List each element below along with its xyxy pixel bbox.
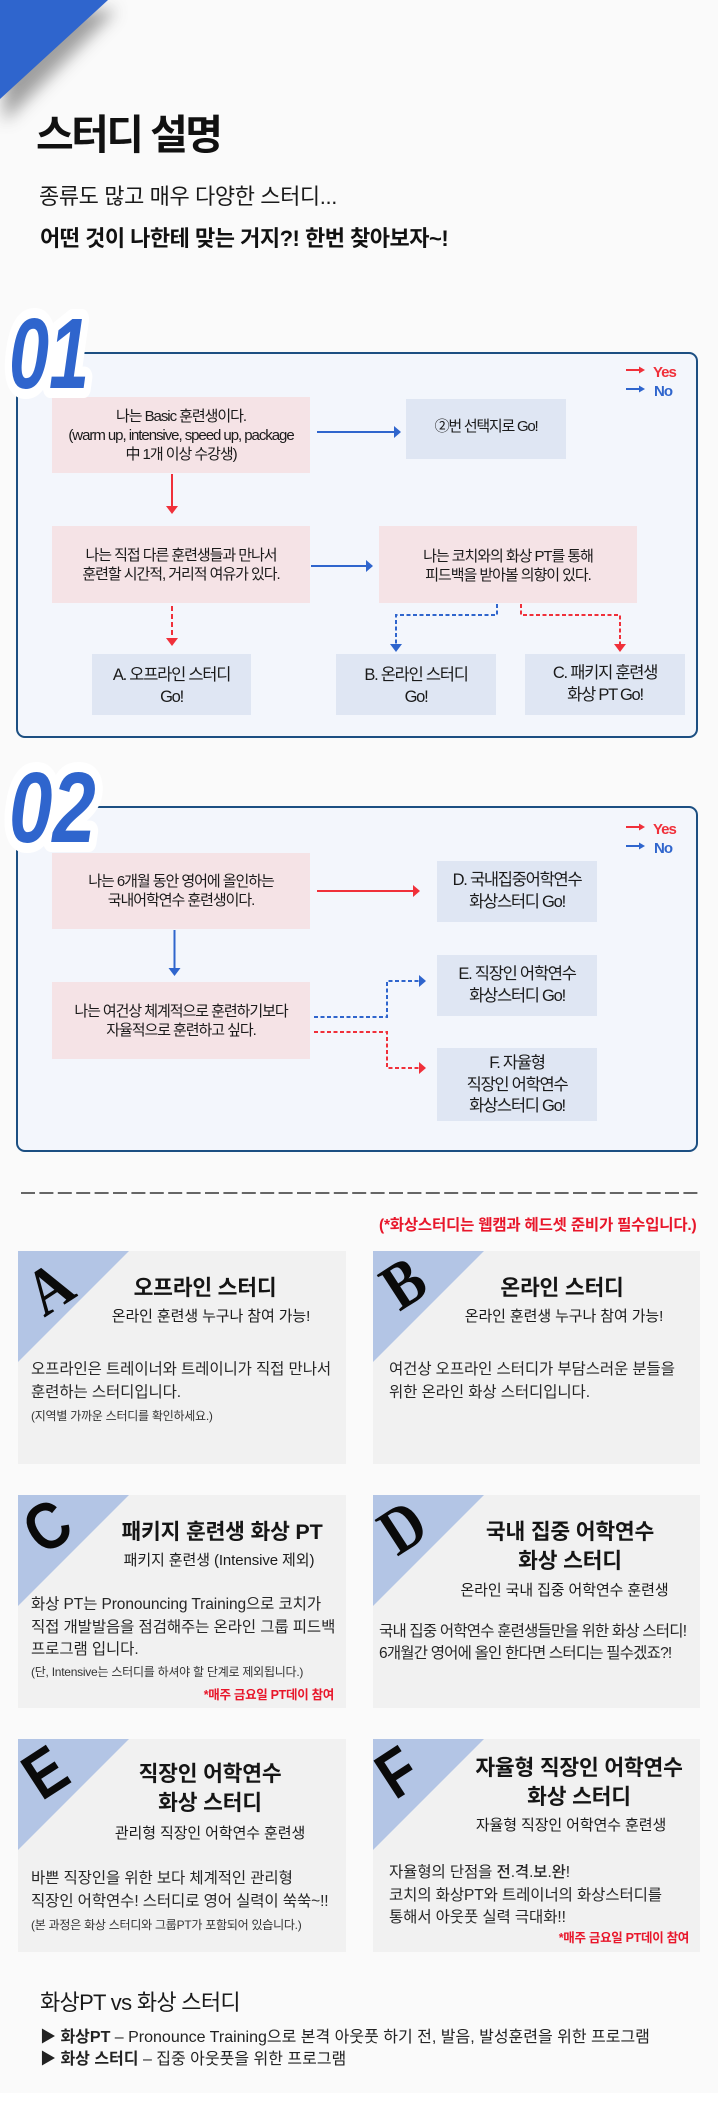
card F body: 코치의 화상PT와 트레이너의 화상스터디를	[389, 1886, 662, 1904]
legend	[626, 821, 677, 856]
panel: flowchart 02	[16, 806, 698, 1152]
panel: card C	[18, 1495, 346, 1708]
card D body: 국내 집중 어학연수 훈련생들만을 위한 화상 스터디!	[379, 1623, 686, 1640]
panel: card B	[373, 1251, 700, 1464]
webcam notice: (*화상스터디는 웹캠과 헤드셋 준비가 필수입니다.)	[379, 1217, 696, 1234]
result F: 화상스터디 Go!	[469, 1097, 565, 1115]
question: Basic trainee: (warm up, intensive, speed up, package	[68, 426, 294, 444]
result B: B. 온라인 스터디	[364, 666, 468, 684]
card F title	[475, 1756, 683, 1808]
question: self-directed: 자율적으로 훈련하고 싶다.	[106, 1022, 256, 1038]
card C body	[31, 1596, 335, 1658]
result B: Go!	[405, 688, 427, 706]
panel: card F	[373, 1739, 700, 1952]
result F: F. 자율형	[489, 1054, 545, 1072]
card C body: 화상 PT는 Pronouncing Training으로 코치가	[31, 1596, 321, 1613]
question: offline time: 나는 직접 다른 훈련생들과 만나서	[86, 546, 276, 564]
card F body	[389, 1864, 662, 1926]
card A note: (지역별 가까운 스터디를 확인하세요.)	[31, 1409, 213, 1423]
card D title: 화상 스터디	[518, 1548, 622, 1572]
result A: Go!	[160, 688, 183, 706]
card D title: 국내 집중 어학연수	[486, 1520, 654, 1544]
card C body: 직접 개발발음을 점검해주는 온라인 그룹 피드백	[31, 1618, 335, 1636]
card B body	[389, 1361, 675, 1400]
result D: 화상스터디 Go!	[469, 892, 565, 910]
legend: Yes	[653, 821, 677, 838]
card E subtitle: 관리형 직장인 어학연수 훈련생	[115, 1825, 305, 1842]
card B subtitle: 온라인 훈련생 누구나 참여 가능!	[465, 1308, 663, 1325]
card E body: 바쁜 직장인을 위한 보다 체계적인 관리형	[31, 1870, 293, 1887]
card F title: 자율형 직장인 어학연수	[475, 1756, 683, 1780]
flow arrows	[166, 426, 626, 652]
comparison heading: 화상PT vs 화상 스터디	[40, 1990, 240, 2015]
card A body	[31, 1361, 331, 1400]
card A body: 훈련하는 스터디입니다.	[31, 1384, 181, 1400]
card B body: 여건상 오프라인 스터디가 부담스러운 분들을	[389, 1361, 675, 1378]
card E title: 화상 스터디	[158, 1790, 262, 1814]
card C body: 프로그램 입니다.	[31, 1641, 139, 1658]
panel: card D	[373, 1495, 700, 1708]
result A	[92, 654, 251, 715]
card D body: 6개월간 영어에 올인 한다면 스터디는 필수겠죠?!	[379, 1645, 671, 1662]
result: go to 2	[406, 399, 566, 459]
card D subtitle: 온라인 국내 집중 어학연수 훈련생	[460, 1582, 669, 1599]
card F subtitle: 자율형 직장인 어학연수 훈련생	[476, 1817, 666, 1834]
card B title: 온라인 스터디	[500, 1276, 624, 1300]
legend	[626, 364, 677, 399]
panel: flowchart 01	[16, 352, 698, 738]
question: offline time	[52, 526, 310, 603]
question: video PT	[379, 526, 637, 603]
result E: E. 직장인 어학연수	[458, 965, 576, 983]
question: 6 month immersion: 국내어학연수 훈련생이다.	[108, 892, 254, 909]
card F red note: *매주 금요일 PT데이 참여	[559, 1931, 689, 1945]
card E body: 직장인 어학연수! 스터디로 영어 실력이 쑥쑥~!!	[31, 1892, 328, 1910]
card D title	[486, 1520, 654, 1572]
result B	[336, 654, 496, 715]
card C red note: *매주 금요일 PT데이 참여	[204, 1688, 334, 1702]
card F title: 화상 스터디	[527, 1784, 631, 1808]
card A subtitle: 온라인 훈련생 누구나 참여 가능!	[112, 1308, 310, 1325]
question: self-directed	[52, 982, 310, 1059]
card A body: 오프라인은 트레이너와 트레이니가 직접 만나서	[31, 1361, 331, 1378]
panel: card A	[18, 1251, 346, 1464]
panel: card E	[18, 1739, 346, 1952]
question: self-directed: 나는 여건상 체계적으로 훈련하기보다	[74, 1002, 288, 1020]
result F	[437, 1048, 597, 1121]
card C title: 패키지 훈련생 화상 PT	[121, 1520, 323, 1544]
question: 6 month immersion	[52, 853, 310, 929]
card E title	[139, 1762, 281, 1814]
flow arrows	[168, 885, 426, 1074]
intro line 1: 종류도 많고 매우 다양한 스터디...	[39, 184, 337, 209]
result C: 화상 PT Go!	[567, 686, 643, 704]
card E body	[31, 1870, 328, 1910]
question: 6 month immersion: 나는 6개월 동안 영어에 올인하는	[88, 873, 274, 890]
result A: A. 오프라인 스터디	[113, 666, 230, 684]
card E note: (본 과정은 화상 스터디와 그룹PT가 포함되어 있습니다.)	[31, 1918, 302, 1932]
result E	[437, 955, 597, 1016]
question: Basic trainee: 나는 Basic 훈련생이다.	[116, 408, 246, 424]
result E: 화상스터디 Go!	[469, 986, 565, 1004]
card F body: 통해서 아웃풋 실력 극대화!!	[389, 1909, 566, 1926]
card B body: 위한 온라인 화상 스터디입니다.	[389, 1384, 590, 1400]
title: 스터디 설명	[36, 112, 220, 158]
result C: C. 패키지 훈련생	[553, 664, 657, 682]
result D: D. 국내집중어학연수	[453, 871, 581, 889]
comparison line 1: ▶ 화상PT – Pronounce Training으로 본격 아웃풋 하기 전, 발음, 발성훈련을 위한 프로그램	[40, 2029, 650, 2046]
question: offline time: 훈련할 시간적, 거리적 여유가 있다.	[82, 566, 280, 582]
result C	[525, 654, 685, 715]
card C note: (단, Intensive는 스터디를 하셔야 할 단계로 제외됩니다.)	[31, 1665, 303, 1679]
card D body	[379, 1623, 686, 1662]
comparison line 2: ▶ 화상 스터디 – 집중 아웃풋을 위한 프로그램	[40, 2051, 346, 2068]
question: Basic trainee	[52, 397, 310, 473]
result F: 직장인 어학연수	[467, 1076, 567, 1094]
corner triangle	[0, 0, 118, 124]
section: PT vs study	[40, 1990, 650, 2068]
question: video PT: 피드백을 받아볼 의향이 있다.	[425, 566, 591, 584]
result: go to 2: ②번 선택지로 Go!	[435, 418, 537, 435]
card C subtitle: 패키지 훈련생 (Intensive 제외)	[124, 1552, 314, 1569]
card A title: 오프라인 스터디	[134, 1276, 276, 1300]
question: video PT: 나는 코치와의 화상 PT를 통해	[423, 548, 593, 564]
intro line 2: 어떤 것이 나한테 맞는 거지?! 한번 찾아보자~!	[40, 226, 448, 251]
result D	[437, 861, 597, 922]
card F body: 자율형의 단점을 전.격.보.완!	[389, 1864, 570, 1881]
question: Basic trainee: 中 1개 이상 수강생)	[125, 446, 237, 462]
card E title: 직장인 어학연수	[139, 1762, 281, 1786]
legend: Yes	[653, 364, 677, 381]
